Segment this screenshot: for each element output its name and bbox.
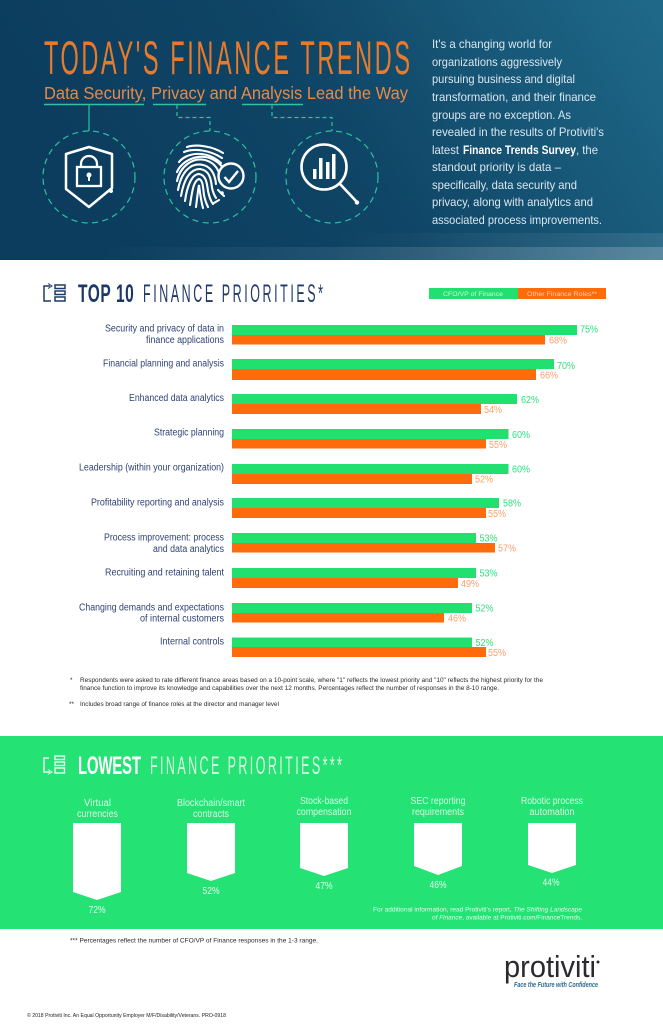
- title: TODAY'S FINANCE TRENDS: [44, 31, 410, 84]
- row 6: 58%: [503, 498, 521, 510]
- row 8: [105, 568, 498, 590]
- item: robotic process automation: Robotic process: [521, 796, 583, 807]
- row 4: 60%: [512, 430, 530, 441]
- row 10: Internal controls: [160, 636, 224, 648]
- subtitle connectors: [44, 104, 332, 131]
- row 9: Changing demands and expectations: [79, 602, 224, 614]
- item: blockchain: 52%: [202, 886, 220, 897]
- row 8: Recruiting and retaining talent: [105, 568, 224, 578]
- row 6: 55%: [488, 509, 506, 520]
- row 2: 70%: [557, 361, 575, 372]
- intro paragraph: transformation, and their finance: [432, 90, 596, 104]
- item: virtual currencies: Virtual: [84, 798, 111, 809]
- row 4: 55%: [489, 440, 507, 451]
- footnote: lowest priorities: *** Percentages reflect the number of CFO/VP of Finance responses in the 1-3 range.: [70, 938, 318, 944]
- intro paragraph: specifically, data security and: [432, 178, 577, 192]
- legend: Other Finance Roles**: [527, 291, 598, 298]
- section heading: lowest: [44, 752, 342, 780]
- row 1: Security and privacy of data in: [105, 324, 224, 334]
- row 4: [154, 428, 530, 451]
- intro paragraph: Finance Trends Survey: [463, 143, 576, 157]
- footnotes: [69, 677, 543, 708]
- icon: shield with padlock: [43, 131, 135, 223]
- intro paragraph: , the: [576, 143, 598, 157]
- row 1: 75%: [580, 324, 598, 336]
- footnotes: Respondents were asked to rate different finance areas based on a 10-point scale, where "1" reflects the lowest priority and "10" reflects the highest priority for the: [80, 677, 543, 684]
- row 6: Profitability reporting and analysis: [91, 498, 224, 508]
- row 7: Process improvement: process: [104, 532, 224, 544]
- item: robotic process automation: 44%: [542, 878, 560, 888]
- row 5: 60%: [512, 464, 530, 476]
- row 2: Financial planning and analysis: [103, 358, 224, 370]
- legend: [429, 288, 606, 299]
- intro paragraph: standout priority is data –: [432, 160, 561, 174]
- bar chart: top 10 priorities: [79, 324, 598, 659]
- footnotes: finance function to improve its knowledge and capabilities over the next 12 months. Percentages reflect the number of responses in the 8-10 range.: [80, 685, 499, 692]
- item: stock-based compensation: compensation: [296, 807, 352, 818]
- row 6: [91, 498, 521, 520]
- item: stock-based compensation: [296, 796, 352, 892]
- legend: CFO/VP of Finance: [443, 291, 503, 298]
- icon: fingerprint with check mark: [164, 131, 256, 223]
- row 1: 68%: [549, 336, 567, 346]
- item: robotic process automation: automation: [530, 807, 574, 818]
- footnotes: Includes broad range of finance roles at the director and manager level: [80, 701, 280, 708]
- footnotes: **: [69, 701, 75, 708]
- icon: list: [44, 284, 65, 301]
- row 1: [105, 324, 598, 346]
- intro paragraph: associated process improvements.: [432, 213, 602, 227]
- item: stock-based compensation: Stock-based: [300, 796, 348, 807]
- row 5: [79, 462, 530, 486]
- row 9: 52%: [476, 604, 494, 614]
- item: robotic process automation: [521, 796, 583, 888]
- row 5: 52%: [475, 474, 493, 486]
- row 9: [79, 602, 494, 624]
- item: blockchain: Blockchain/smart: [177, 798, 245, 809]
- row 7: 53%: [480, 534, 498, 544]
- heading text: FINANCE PRIORITIES*: [143, 280, 323, 308]
- item: SEC reporting: SEC reporting: [410, 796, 466, 807]
- row 3: [129, 393, 539, 416]
- item: virtual currencies: 72%: [88, 905, 106, 916]
- row 7: 57%: [498, 544, 516, 554]
- header banner: [0, 0, 663, 260]
- row 2: [103, 358, 575, 382]
- logo: protiviti: protiviti: [504, 949, 596, 984]
- additional information note: of Finance, available at Protiviti.com/FinanceTrends.: [432, 914, 582, 922]
- intro paragraph: [432, 37, 604, 227]
- section heading: top 10: [44, 280, 323, 308]
- heading text: LOWEST: [78, 752, 141, 780]
- row 2: 66%: [540, 370, 558, 382]
- row 7: and data analytics: [153, 544, 224, 555]
- intro paragraph: privacy, along with analytics and: [432, 195, 593, 209]
- subtitle: Data Security, Privacy and Analysis Lead the Way: [44, 83, 408, 103]
- item: stock-based compensation: 47%: [316, 881, 333, 892]
- item: SEC reporting: [410, 796, 466, 891]
- row 9: 46%: [448, 614, 466, 624]
- footnotes: *: [70, 677, 73, 684]
- intro paragraph: pursuing business and digital: [432, 72, 575, 86]
- item: virtual currencies: currencies: [77, 809, 118, 820]
- row 3: 54%: [484, 405, 502, 416]
- heading text: FINANCE PRIORITIES***: [150, 752, 342, 780]
- intro paragraph: revealed in the results of Protiviti's: [432, 125, 604, 139]
- intro paragraph: organizations aggressively: [432, 55, 562, 69]
- item: virtual currencies: [73, 798, 121, 916]
- row 3: Enhanced data analytics: [129, 393, 224, 404]
- row 4: Strategic planning: [154, 428, 224, 438]
- row 3: 62%: [521, 395, 539, 406]
- row 9: of internal customers: [140, 614, 224, 624]
- item: SEC reporting: 46%: [430, 880, 447, 891]
- item: blockchain: [177, 798, 245, 897]
- additional information note: [373, 906, 582, 922]
- intro paragraph: It's a changing world for: [432, 37, 552, 51]
- additional information note: For additional information, read Protiviti's report, The Shifting Landscape: [373, 906, 582, 914]
- heading text: TOP 10: [78, 280, 134, 308]
- row 10: [160, 636, 506, 659]
- row 8: 49%: [461, 579, 479, 590]
- copyright: © 2018 Protiviti Inc. An Equal Opportunity Employer M/F/Disability/Veterans. PRO-0918: [27, 1012, 226, 1019]
- intro paragraph: latest: [432, 143, 460, 157]
- icon: list: [44, 756, 64, 774]
- row 10: 52%: [476, 638, 494, 649]
- row 1: finance applications: [146, 335, 224, 346]
- row 7: [104, 532, 516, 555]
- intro paragraph: groups are no exception. As: [432, 108, 571, 122]
- row 10: 55%: [488, 648, 506, 659]
- item: blockchain: contracts: [193, 809, 229, 820]
- item: SEC reporting: requirements: [412, 807, 464, 818]
- icon: magnifying glass with bar chart: [286, 131, 378, 223]
- tagline: Face the Future with Confidence: [514, 982, 598, 989]
- panel: lowest finance priorities: [0, 736, 663, 929]
- row 8: 53%: [480, 568, 498, 580]
- row 5: Leadership (within your organization): [79, 462, 224, 474]
